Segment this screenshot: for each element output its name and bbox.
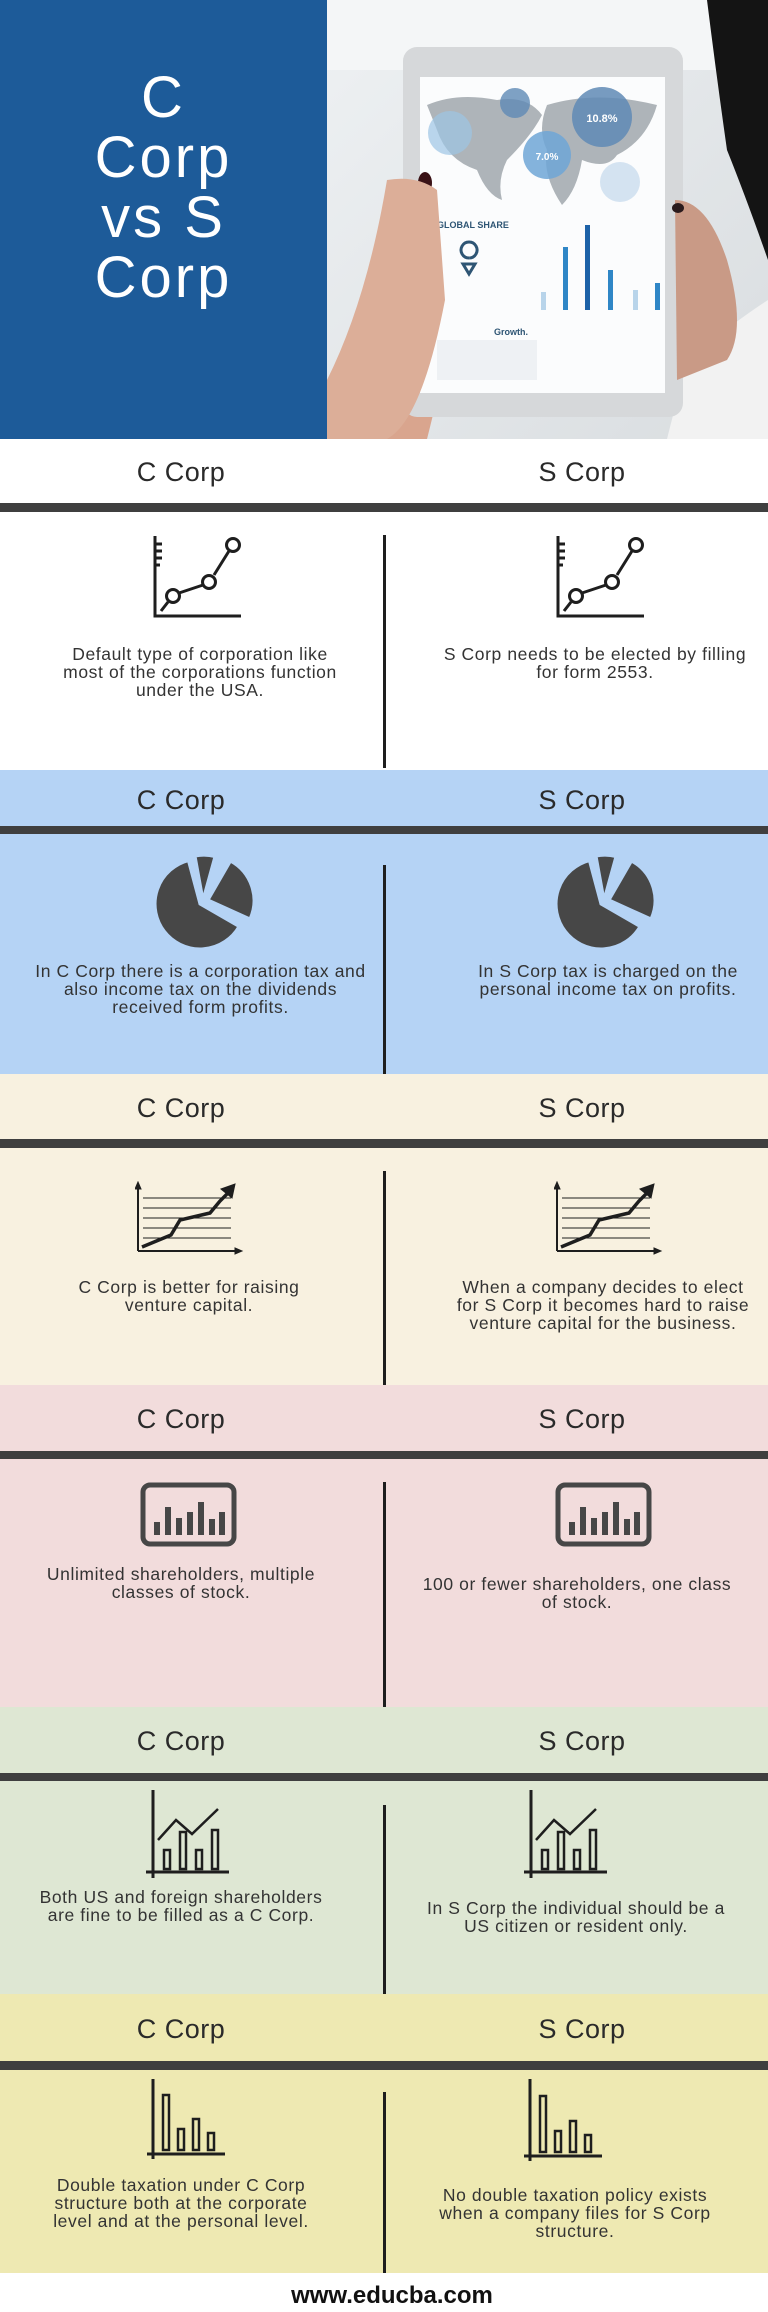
- icon: line chart left: [154, 536, 241, 618]
- icon: bar chart screen right: [556, 1482, 652, 1546]
- section 1 content: [0, 512, 768, 770]
- hair: [707, 0, 768, 260]
- icon: trend arrow right: [554, 1181, 662, 1255]
- tablet: [403, 47, 683, 417]
- text: C Corp double taxation: structure both at the corporate: [54, 2193, 308, 2213]
- icon: trend arrow left: [135, 1181, 244, 1255]
- text: C Corp venture capital: C Corp is better for raising: [78, 1277, 300, 1297]
- section 3 header: [0, 1074, 768, 1139]
- footer: website: www.educba.com: [291, 2282, 493, 2309]
- text: S Corp no double taxation: when a company files for S Corp: [439, 2203, 711, 2223]
- section 1 header: C Corp / S Corp: [0, 439, 768, 503]
- text: C Corp double taxation: level and at the personal level.: [53, 2211, 309, 2231]
- right hand: [675, 200, 737, 380]
- section 4 header: S Corp: [538, 1404, 626, 1434]
- text: C Corp default: [63, 644, 337, 700]
- text: S Corp venture capital: venture capital for the business.: [470, 1313, 736, 1333]
- text: S Corp no double taxation: structure.: [536, 2221, 614, 2241]
- section 2 header: C Corp: [137, 785, 225, 815]
- text: C Corp default: most of the corporations function: [63, 662, 337, 682]
- section 4 header: C Corp: [137, 1404, 225, 1434]
- text: C Corp default: Default type of corporation like: [72, 644, 328, 664]
- section 2 content: [0, 834, 768, 1074]
- icon: pie chart left: [156, 856, 253, 948]
- text: C Corp venture capital: venture capital.: [125, 1295, 253, 1315]
- tablet: 10.8%: [586, 113, 618, 125]
- text: C Corp venture capital: [78, 1277, 300, 1315]
- section 6 header: C Corp: [137, 2014, 225, 2044]
- text: C Corp tax: received form profits.: [112, 997, 289, 1017]
- text: S Corp no double taxation: No double taxation policy exists: [443, 2185, 707, 2205]
- section 5 header: C Corp: [137, 1726, 225, 1756]
- icon: descending bars left: [147, 2079, 225, 2159]
- text: S Corp US citizen: In S Corp the individual should be a: [427, 1898, 725, 1918]
- text: S Corp shareholders: 100 or fewer shareholders, one class: [423, 1574, 731, 1594]
- section 5 header: [0, 1707, 768, 1773]
- section 1 header: C Corp / S Corp: S Corp: [538, 457, 626, 487]
- text: S Corp US citizen: [427, 1898, 725, 1936]
- section 2 header: [0, 770, 768, 826]
- icon: line chart right: [556, 536, 644, 618]
- section 6 content: [0, 2070, 768, 2273]
- title: vs S: [101, 185, 226, 250]
- text: C Corp tax: [35, 961, 366, 1017]
- text: C Corp tax: also income tax on the dividends: [64, 979, 337, 999]
- text: S Corp shareholders: [423, 1574, 731, 1612]
- text: C Corp tax: In C Corp there is a corporation tax and: [35, 961, 366, 981]
- text: S Corp US citizen: US citizen or resident only.: [464, 1916, 688, 1936]
- title: Corp: [95, 125, 232, 190]
- left hand: [347, 175, 452, 439]
- title: Corp: [95, 245, 232, 310]
- icon: pie chart right: [558, 856, 654, 948]
- section 4 content: [0, 1459, 768, 1707]
- text: C Corp default: under the USA.: [136, 680, 264, 700]
- tablet: 7.0%: [536, 152, 559, 163]
- tablet: GLOBAL SHARE: [437, 220, 509, 230]
- text: S Corp tax: [478, 961, 738, 999]
- section 6 header: [0, 1994, 768, 2061]
- section 5 content: [0, 1781, 768, 1994]
- text: C Corp foreign shareholders: [40, 1887, 322, 1925]
- text: S Corp venture capital: When a company decides to elect: [462, 1277, 744, 1297]
- text: C Corp shareholders: classes of stock.: [112, 1582, 250, 1602]
- section 3 header: C Corp: [137, 1093, 225, 1123]
- text: C Corp foreign shareholders: are fine to be filled as a C Corp.: [48, 1905, 314, 1925]
- section 4 header: [0, 1385, 768, 1451]
- text: C Corp double taxation: Double taxation under C Corp: [57, 2175, 305, 2195]
- section 2 header: S Corp: [538, 785, 626, 815]
- text: S Corp no double taxation: [439, 2185, 711, 2241]
- icon: bar chart screen left: [140, 1482, 236, 1546]
- text: C Corp double taxation: [53, 2175, 309, 2231]
- section 6 header: S Corp: [538, 2014, 626, 2044]
- icon: bars with line right: [524, 1790, 607, 1878]
- title: C: [141, 65, 186, 130]
- text: S Corp tax: personal income tax on profits.: [480, 979, 736, 999]
- title: [95, 65, 232, 310]
- text: C Corp shareholders: [47, 1564, 315, 1602]
- header: title panel: [0, 0, 327, 439]
- section 1 header: C Corp / S Corp: C Corp: [137, 457, 225, 487]
- tablet: Growth.: [494, 327, 528, 337]
- icon: bars with line left: [146, 1790, 229, 1878]
- text: C Corp foreign shareholders: Both US and foreign shareholders: [40, 1887, 322, 1907]
- section 5 header: S Corp: [538, 1726, 626, 1756]
- text: S Corp election: [444, 644, 746, 682]
- text: S Corp venture capital: for S Corp it becomes hard to raise: [457, 1295, 749, 1315]
- text: S Corp tax: In S Corp tax is charged on the: [478, 961, 738, 981]
- text: S Corp venture capital: [457, 1277, 749, 1333]
- section 3 content: [0, 1148, 768, 1385]
- text: S Corp election: for form 2553.: [536, 662, 654, 682]
- text: S Corp shareholders: of stock.: [542, 1592, 612, 1612]
- sleeve: [667, 300, 768, 439]
- section 3 header: S Corp: [538, 1093, 626, 1123]
- text: C Corp shareholders: Unlimited shareholders, multiple: [47, 1564, 315, 1584]
- header photo: tablet with charts: [327, 0, 768, 439]
- text: S Corp election: S Corp needs to be elected by filling: [444, 644, 746, 664]
- icon: descending bars right: [524, 2079, 602, 2161]
